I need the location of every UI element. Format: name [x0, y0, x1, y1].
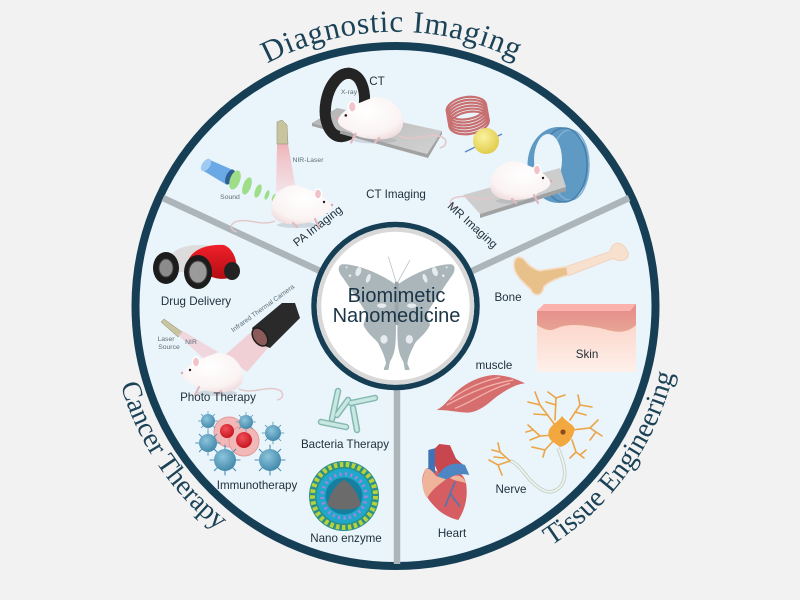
label: Drug Delivery: Drug Delivery [161, 295, 231, 308]
laser probe [277, 120, 288, 144]
label: PA Imaging: PA Imaging [291, 203, 345, 249]
label: Nano enzyme: Nano enzyme [310, 532, 382, 545]
label: Laser Source: Source [158, 344, 180, 351]
label: Bone: Bone [494, 291, 522, 304]
label: Laser Source: Laser [157, 336, 175, 343]
bacteria icon [321, 391, 375, 430]
PA mouse [231, 185, 333, 232]
heart icon [422, 444, 469, 520]
drug delivery car [153, 245, 240, 289]
thermal camera [249, 303, 300, 349]
label: Sound: Sound [220, 194, 240, 201]
label: X-ray: X-ray [341, 89, 358, 96]
nerve cell icon [489, 392, 602, 492]
label: muscle: muscle [476, 359, 512, 372]
center circle [314, 224, 477, 388]
bone icon [514, 243, 628, 295]
label: MR Imaging: MR Imaging [445, 200, 500, 251]
label: Nerve: Nerve [496, 483, 526, 496]
label: Heart: Heart [438, 527, 467, 540]
immunotherapy illustration [195, 411, 285, 475]
segment divider: right [472, 198, 629, 271]
label: Skin: Skin [576, 348, 598, 361]
label: Infrared Thermal Camera: Infrared Thermal Camera [230, 283, 296, 334]
panel: cancer therapy [153, 245, 389, 545]
label: Bacteria Therapy: Bacteria Therapy [301, 438, 389, 451]
panel: diagnostic imaging [199, 70, 589, 251]
NIR beam [178, 331, 218, 359]
label: CT Imaging: CT Imaging [366, 188, 426, 201]
heading: Tissue Engineering: Tissue Engineering [541, 371, 678, 544]
camera beam [225, 333, 268, 372]
heading: Diagnostic Imaging: Diagnostic Imaging [259, 12, 522, 64]
muscle icon [437, 375, 525, 413]
MR coil icon [445, 94, 491, 137]
skin block [537, 304, 636, 372]
center title: Nanomedicine [333, 305, 460, 327]
butterfly silhouette [339, 257, 455, 370]
center title: Biomimetic [348, 285, 445, 307]
heading: Cancer Therapy: Cancer Therapy [122, 382, 226, 529]
segment divider: bottom [394, 385, 400, 564]
label: CT: CT [369, 75, 385, 88]
nano enzyme particle [309, 461, 379, 531]
label: NIR: NIR [185, 339, 197, 346]
sound waves [227, 169, 277, 202]
photoacoustic laser beam [276, 144, 296, 192]
panel: tissue engineering [422, 243, 636, 540]
photo therapy mouse [181, 353, 283, 400]
CT scanner illustration [312, 70, 446, 158]
laser source probe [161, 319, 182, 337]
MR scanner illustration [450, 127, 590, 218]
main circle panel [136, 46, 656, 566]
segment divider: left [163, 198, 320, 271]
label: Photo Therapy: Photo Therapy [180, 391, 256, 404]
label: Immunotherapy: Immunotherapy [217, 479, 297, 492]
spin ball icon [465, 128, 502, 154]
sound transducer [199, 157, 237, 186]
label: NIR-Laser: NIR-Laser [293, 157, 324, 164]
